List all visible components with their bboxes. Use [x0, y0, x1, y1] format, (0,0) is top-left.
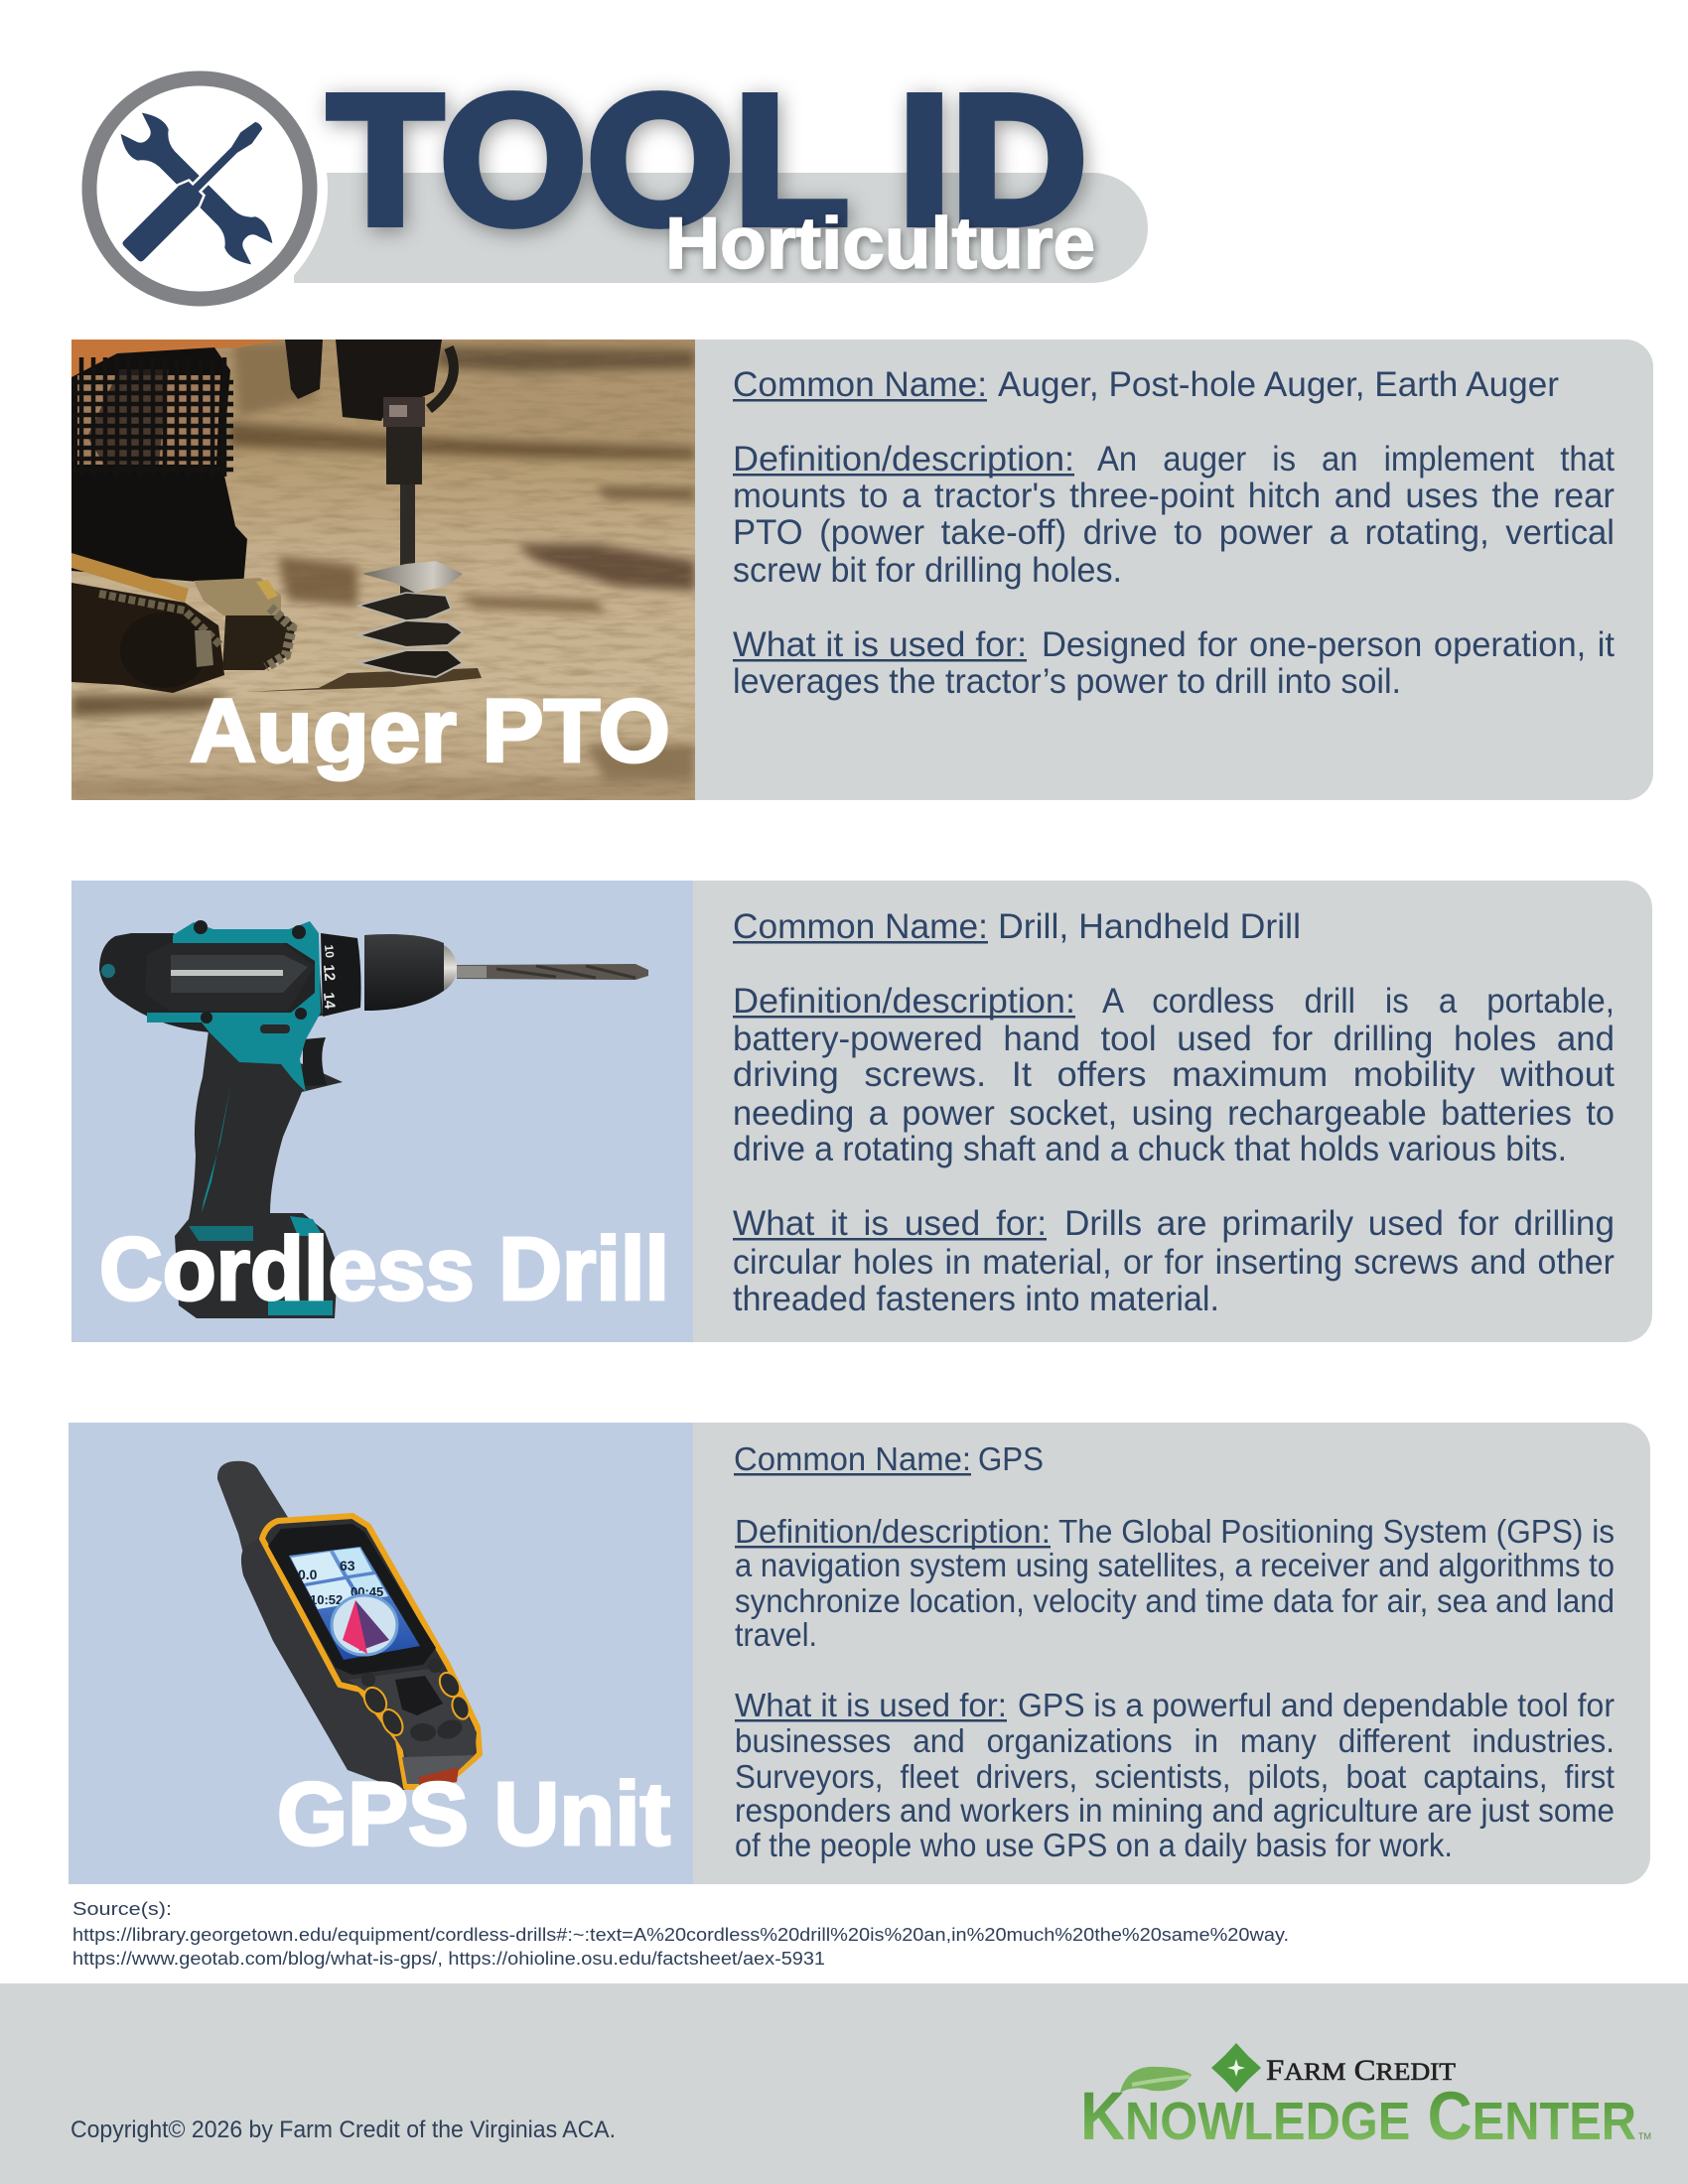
icon: circled crossed wrench and screwdriver: [71, 61, 328, 317]
panel background: [645, 1423, 1650, 1884]
panel background: [645, 881, 1652, 1342]
panel text: GPS: responders and workers in mining and agriculture are just some: [735, 1793, 1615, 1830]
panel text: auger: PTO (power take-off) drive to power a rotating, vertical: [733, 513, 1615, 552]
subtitle: Horticulture: Horticulture: [665, 204, 1095, 284]
label: Cordless Drill: Cordless Drill: [99, 1220, 669, 1319]
photo: cordless drill: 14: [320, 992, 338, 1011]
panel text: auger: Common Name:: [733, 365, 987, 404]
photo: auger on skid steer: [71, 340, 695, 800]
panel: cordless drill: [71, 881, 1652, 1342]
trademark: TM: [1638, 2131, 1651, 2141]
text: Farm Credit: FARM CREDIT: [1266, 2054, 1456, 2087]
panel text: drill: Drills are primarily used for drilling: [1064, 1204, 1615, 1243]
panel text: GPS: What it is used for:: [735, 1688, 1007, 1724]
panel text: auger: Designed for one-person operation, it: [1042, 625, 1615, 664]
panel text: drill: circular holes in material, or for inserting screws and other: [733, 1243, 1615, 1282]
label: GPS Unit: GPS Unit: [277, 1765, 670, 1864]
panel text: drill: Common Name:: [733, 907, 988, 946]
image panel background: [69, 1423, 693, 1884]
panel text: auger: [733, 365, 1615, 701]
keypad: [348, 1668, 477, 1757]
panel background: [645, 340, 1653, 800]
panel text: drill: drive a rotating shaft and a chuck that holds various bits.: [733, 1130, 1567, 1168]
panel text: GPS: [734, 1441, 1616, 1864]
panel text: drill: [733, 907, 1615, 1318]
panel text: GPS: travel.: [735, 1617, 817, 1654]
footer band: [0, 1983, 1688, 2184]
panel text: auger: leverages the tractor’s power to drill into soil.: [733, 662, 1401, 701]
auger head: [285, 340, 323, 399]
panel: GPS unit: [69, 1423, 1650, 1884]
panel text: drill: threaded fasteners into material.: [733, 1280, 1219, 1318]
sources: Source(s):: [72, 1898, 172, 1919]
panel text: drill: Drill, Handheld Drill: [998, 907, 1301, 946]
sources: https://www.geotab.com/blog/what-is-gps/, https://ohioline.osu.edu/factsheet/aex-5931: [72, 1948, 825, 1969]
panel text: GPS: GPS: [978, 1441, 1044, 1478]
panel text: GPS: Definition/description:: [735, 1514, 1051, 1551]
panel text: GPS: GPS is a powerful and dependable tool for: [1018, 1688, 1615, 1724]
panel text: GPS: The Global Positioning System (GPS) is: [1058, 1514, 1615, 1551]
panel text: drill: battery-powered hand tool used for drilling holes and: [733, 1020, 1615, 1058]
photo: handheld GPS: 00:45: [351, 1584, 383, 1599]
photo: handheld GPS: 0.0: [298, 1567, 318, 1582]
panel text: auger: mounts to a tractor's three-point hitch and uses the rear: [733, 477, 1615, 515]
panel text: GPS: businesses and organizations in many different industries.: [735, 1723, 1615, 1760]
photo: handheld GPS: [217, 1461, 480, 1790]
image panel background: [71, 881, 693, 1342]
title: TOOL ID: TOOL ID: [328, 58, 1087, 263]
panel text: GPS: a navigation system using satellites, a receiver and algorithms to: [735, 1548, 1615, 1584]
panel text: auger: What it is used for:: [733, 625, 1027, 664]
panel text: GPS: Surveyors, fleet drivers, scientists, pilots, boat captains, first: [735, 1759, 1616, 1796]
panel text: drill: driving screws. It offers maximum mobility without: [733, 1055, 1615, 1094]
panel text: auger: screw bit for drilling holes.: [733, 551, 1122, 590]
panel: auger PTO: [71, 340, 1653, 800]
panel text: auger: Definition/description:: [733, 440, 1074, 478]
banner pill: [294, 173, 1148, 283]
panel text: auger: Auger, Post-hole Auger, Earth Auger: [998, 365, 1559, 404]
photo: cordless drill: 12: [320, 964, 338, 982]
cab body: [71, 347, 247, 586]
panel text: drill: A cordless drill is a portable,: [1102, 982, 1615, 1021]
label: Auger PTO: Auger PTO: [190, 682, 670, 781]
logo: Farm Credit Knowledge Center: [1080, 2043, 1651, 2154]
panel text: drill: Definition/description:: [733, 982, 1075, 1021]
header banner: [71, 58, 1148, 317]
sources: [72, 1898, 1289, 1969]
sources: https://library.georgetown.edu/equipment/cordless-drills#:~:text=A%20cordless%20drill%20is%20an,in%20much%20the%20same%20way.: [72, 1924, 1289, 1945]
panel text: drill: needing a power socket, using rechargeable batteries to: [733, 1094, 1615, 1133]
panel text: GPS: synchronize location, velocity and time data for air, sea and land: [735, 1583, 1615, 1620]
photo: cordless drill: [99, 920, 648, 1318]
photo: handheld GPS: 63: [340, 1558, 355, 1573]
photo: cordless drill: 10: [322, 944, 337, 959]
tracks: [71, 583, 224, 693]
icon: leaf emblem: [1211, 2043, 1261, 2093]
copyright: Copyright© 2026 by Farm Credit of the Virginias ACA.: [70, 2116, 616, 2143]
auger flights: [247, 668, 482, 692]
text: Knowledge Center: KNOWLEDGE CENTER: [1080, 2078, 1636, 2154]
photo: handheld GPS: 10:52: [310, 1592, 343, 1607]
icon: green leaf: [1120, 2067, 1192, 2093]
panel text: GPS: Common Name:: [734, 1441, 971, 1478]
panel text: auger: An auger is an implement that: [1097, 440, 1615, 478]
panel text: GPS: of the people who use GPS on a daily basis for work.: [735, 1828, 1453, 1864]
panel text: drill: What it is used for:: [733, 1204, 1047, 1243]
